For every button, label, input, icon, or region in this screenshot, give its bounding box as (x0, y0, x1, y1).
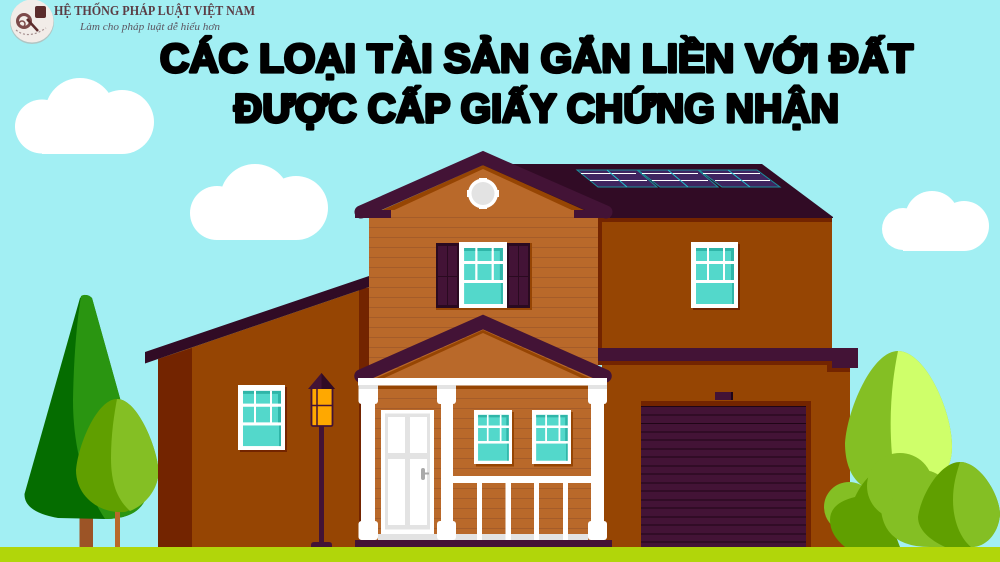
porch (355, 378, 612, 547)
central tower wall (369, 210, 598, 547)
cloud centre (190, 164, 328, 240)
porch beam (358, 378, 607, 386)
tall pine tree (24, 295, 147, 548)
porch window right (532, 410, 573, 466)
left wing window (238, 385, 287, 452)
upper gable roof (355, 158, 610, 218)
round attic window (467, 178, 499, 209)
door (381, 410, 434, 534)
bush cluster (824, 453, 1000, 547)
porch step (378, 534, 588, 540)
site name: HỆ THỐNG PHÁP LUẬT VIỆT NAM (54, 1, 255, 19)
eave (598, 348, 858, 368)
porch gable (361, 322, 605, 380)
porch base (355, 540, 612, 547)
title (160, 37, 913, 131)
tall egg tree (845, 351, 952, 495)
left shutter (436, 243, 459, 308)
cloud right (882, 191, 989, 251)
cloud left (15, 78, 154, 154)
right shutter (507, 243, 530, 308)
middle column (437, 385, 456, 540)
title: ĐƯỢC CẤP GIẤY CHỨNG NHẬN (234, 87, 839, 131)
small round tree (76, 399, 158, 548)
right upper window (691, 242, 740, 310)
right column (588, 385, 607, 540)
garage light (715, 392, 733, 400)
porch window left (474, 410, 514, 466)
left wing (145, 276, 369, 547)
shuttered window (436, 242, 532, 310)
left column (358, 385, 378, 540)
front egg bush (918, 462, 1000, 547)
garage door (641, 401, 811, 547)
street lamp (308, 373, 335, 547)
title: CÁC LOẠI TÀI SẢN GẮN LIỀN VỚI ĐẤT (160, 37, 913, 81)
right upper wall (598, 218, 832, 350)
right upper roof (480, 164, 833, 218)
door handle (421, 468, 429, 480)
solar panels (577, 170, 780, 187)
upper gable (355, 158, 610, 218)
site tagline: Làm cho pháp luật dễ hiểu hơn (79, 21, 221, 33)
garage wing (598, 348, 858, 547)
porch roof (361, 322, 605, 376)
logo badge (10, 0, 54, 44)
left wing roof (145, 276, 369, 364)
ground (0, 547, 1000, 562)
railing (453, 476, 591, 540)
